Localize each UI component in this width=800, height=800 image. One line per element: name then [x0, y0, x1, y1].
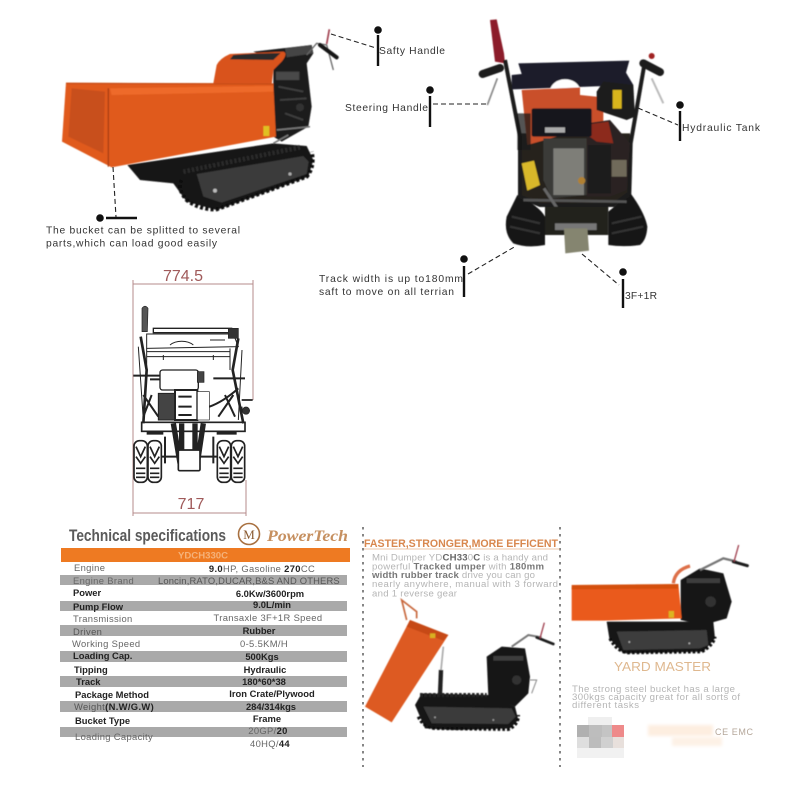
row: bucket type: Bucket Type — [75, 715, 130, 726]
row: loading cap: 500Kgs — [245, 651, 279, 662]
callout: bucket: The bucket can be splitted to several — [46, 226, 240, 236]
callout: bucket: parts,which can load good easily — [46, 238, 218, 250]
yard master body text: 300kgs capacity great for all sorts of — [572, 692, 740, 703]
row: weight: 284/314kgs — [246, 701, 296, 712]
callout: track width: saft to move on all terrian — [319, 287, 454, 298]
callout: track width: Track width is up to180mm — [319, 274, 463, 285]
panel body text — [371, 552, 558, 600]
track tread — [510, 217, 643, 233]
row: loading capacity — [75, 725, 290, 749]
row: tipping: Hydraulic — [244, 664, 286, 675]
dark body behind engine — [520, 133, 630, 207]
bucket — [62, 83, 276, 167]
engine — [673, 545, 747, 625]
row: power: 6.0Kw/3600rpm — [236, 588, 304, 599]
yard master body text: The strong steel bucket has a large — [572, 684, 735, 695]
yard master body text: different tasks — [572, 700, 639, 711]
logo: PowerTech — [238, 524, 348, 545]
row: pump flow: 9.0L/min — [253, 599, 291, 610]
track — [415, 693, 518, 730]
blurred mosaic badge — [577, 717, 624, 758]
row: power: Power — [73, 587, 101, 598]
right control box — [597, 82, 635, 120]
row: working speed — [72, 638, 288, 649]
row: power — [73, 587, 304, 599]
row: package method — [75, 688, 315, 700]
row: driven: Driven — [73, 626, 102, 637]
hydraulic ram — [440, 647, 443, 695]
callout: 3F+1R: 3F+1R — [625, 291, 657, 302]
row: tipping — [74, 664, 286, 675]
logo: PowerTech: M — [243, 527, 255, 542]
row: pump flow — [73, 599, 291, 612]
yard master dumper photo — [572, 545, 747, 653]
tipped dumper photo — [365, 600, 553, 730]
panel: faster stronger — [363, 527, 560, 767]
front view dumper photo — [483, 19, 663, 253]
row: loading capacity: 20GP/20 — [248, 725, 288, 736]
panel: yard master — [572, 545, 754, 758]
row stripes — [60, 575, 347, 737]
row: loading cap — [73, 650, 279, 662]
engine — [253, 45, 313, 143]
blurred certification text — [648, 725, 754, 746]
orange bucket rear — [522, 87, 603, 145]
row: loading capacity: 40HQ/44 — [250, 738, 290, 749]
row: bucket type: Frame — [253, 713, 281, 724]
table header: YDCH330C — [178, 550, 228, 562]
bucket — [572, 584, 682, 621]
row: driven — [73, 625, 276, 637]
row: weight — [74, 701, 296, 712]
panel body text: and 1 reverse gear — [372, 588, 458, 600]
row: track: Track — [76, 676, 101, 687]
row: transmission: Transaxle 3F+1R Speed — [214, 612, 322, 623]
raised bucket — [365, 600, 448, 722]
engine — [522, 108, 592, 225]
row: engine brand — [73, 575, 340, 586]
transmission box — [545, 207, 608, 253]
callout: steering handle — [345, 86, 487, 127]
handle — [307, 29, 337, 70]
logo: PowerTech: PowerTech — [266, 528, 348, 545]
row: engine: 9.0HP, Gasoline 270CC — [209, 563, 315, 574]
callout: bucket — [46, 167, 240, 250]
row: driven: Rubber — [243, 625, 276, 636]
row: working speed: 0-5.5KM/H — [240, 638, 288, 649]
panel heading: FASTER,STRONGER,MORE EFFICENT — [364, 538, 558, 550]
row: bucket type — [75, 713, 281, 726]
row: package method: Package Method — [75, 689, 149, 700]
row: engine: Engine — [74, 562, 105, 573]
row: track: 180*60*38 — [242, 676, 286, 687]
panel body text: Mni Dumper YDCH330C is a handy and — [372, 552, 548, 564]
line drawing of machine — [133, 306, 253, 482]
yard master title: YARD MASTER — [614, 659, 711, 674]
spec table — [60, 548, 350, 749]
row: tipping: Tipping — [74, 664, 108, 675]
callout: safty handle — [331, 26, 445, 66]
row: pump flow: Pump Flow — [73, 601, 124, 612]
track — [607, 622, 715, 653]
technical drawing with dimensions — [133, 268, 253, 516]
row: transmission: Transmission — [73, 613, 133, 624]
callout: steering handle: Steering Handle — [345, 103, 428, 114]
cab cover — [213, 52, 285, 85]
tracks — [506, 193, 647, 246]
heading: technical specifications: Technical specifications — [69, 526, 226, 545]
row: engine brand: Engine Brand — [73, 575, 134, 586]
callout: 3F+1R — [582, 254, 657, 308]
row: package method: Iron Crate/Plywood — [229, 688, 315, 699]
callout: hydraulic tank: Hydraulic Tank — [682, 123, 761, 134]
row: loading capacity: Loading Capacity — [75, 731, 153, 742]
row: working speed: Working Speed — [72, 638, 140, 649]
arms and grips — [483, 53, 663, 205]
row: engine brand: Loncin,RATO,DUCAR,B&S AND OTHERS — [158, 575, 340, 586]
table header — [61, 548, 350, 562]
row: transmission — [73, 612, 322, 624]
row: weight: Weight(N.W/G.W) — [74, 701, 154, 712]
panel body text: nearly anywhere, manual with 3 forward — [372, 579, 558, 590]
yard master body text — [572, 684, 740, 711]
top bar — [512, 61, 633, 89]
blurred certification text: CE EMC — [715, 727, 754, 737]
red safety handle — [490, 19, 505, 63]
panel body text: powerful Tracked umper with 180mm — [372, 562, 544, 572]
dotted dividers — [363, 527, 560, 767]
row: loading cap: Loading Cap. — [73, 650, 132, 661]
callout: hydraulic tank — [638, 101, 761, 141]
side view dumper photo — [62, 29, 337, 210]
row: engine — [74, 562, 315, 574]
dimension lines — [133, 280, 253, 516]
panel body text: width rubber track drive you can go — [371, 570, 535, 581]
engine — [487, 623, 553, 707]
callout: safty handle: Safty Handle — [379, 46, 445, 57]
dimension: track width: 717 — [178, 496, 204, 513]
callout: track width — [319, 246, 516, 298]
row: track — [76, 676, 286, 687]
track — [127, 143, 313, 210]
dimension: overall width: 774.5 — [163, 268, 203, 285]
